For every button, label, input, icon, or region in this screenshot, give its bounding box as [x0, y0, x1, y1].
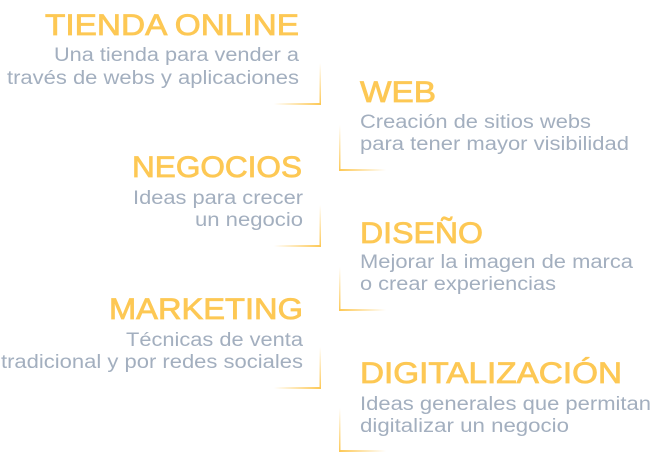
text: diseño description: o crear experiencias [360, 274, 556, 295]
heading: marketing: MARKETING [109, 293, 303, 326]
text: marketing description: Técnicas de venta [126, 330, 303, 351]
panel: digitalización [339, 357, 651, 452]
text: tienda online description [7, 45, 299, 89]
bracket: marketing [274, 347, 321, 389]
panel: marketing [1, 293, 321, 389]
text: negocios description [133, 188, 304, 231]
text: digitalización description [360, 394, 651, 437]
panel: diseño [339, 216, 633, 311]
text: web description: Creación de sitios webs [360, 112, 591, 133]
text: tienda online description: través de webs y aplicaciones [7, 68, 299, 89]
text: web description [360, 112, 629, 155]
panel: negocios [132, 151, 321, 247]
text: tienda online description: Una tienda para vender a [54, 45, 299, 66]
heading: web: WEB [360, 76, 436, 109]
panel: tienda online [7, 9, 321, 105]
bracket: digitalización [339, 408, 386, 452]
text: marketing description: tradicional y por redes sociales [1, 352, 303, 373]
heading: digitalización: DIGITALIZACIÓN [360, 357, 622, 390]
heading: tienda online: TIENDA ONLINE [45, 9, 299, 42]
text: negocios description: un negocio [195, 210, 303, 231]
heading: diseño: DISEÑO [360, 216, 483, 250]
bracket: tienda online [274, 63, 321, 105]
text: negocios description: Ideas para crecer [133, 188, 304, 209]
text: diseño description [360, 252, 633, 295]
bracket: web [339, 125, 386, 171]
text: marketing description [1, 330, 303, 373]
bracket: negocios [274, 205, 321, 247]
bracket: diseño [339, 267, 386, 311]
text: diseño description: Mejorar la imagen de marca [360, 252, 633, 273]
text: web description: para tener mayor visibilidad [360, 134, 629, 155]
panel: web [339, 76, 629, 171]
heading: negocios: NEGOCIOS [132, 151, 302, 184]
text: digitalización description: digitalizar un negocio [360, 416, 569, 437]
text: digitalización description: Ideas generales que permitan [360, 394, 651, 415]
